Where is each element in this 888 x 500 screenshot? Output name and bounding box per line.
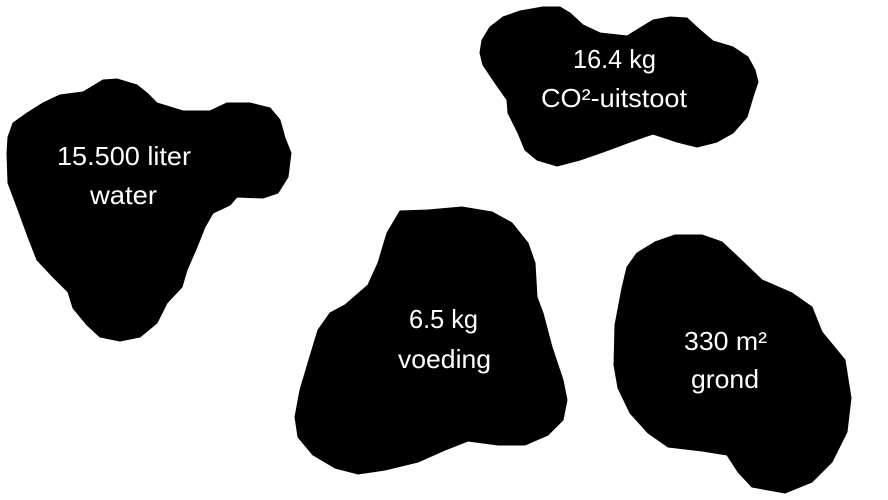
text: 15.500 liter water: 15.500 liter: [57, 141, 191, 171]
blob: voeding: [295, 207, 567, 474]
blob: CO2: [480, 7, 758, 166]
text: 16.4 kg CO2-uitstoot: CO²-uitstoot: [541, 83, 688, 113]
text: 16.4 kg CO2-uitstoot: [541, 44, 688, 113]
text: 16.4 kg CO2-uitstoot: 16.4 kg: [573, 44, 656, 74]
text: 330 m2 grond: grond: [691, 364, 759, 394]
text: 6.5 kg voeding: [398, 304, 491, 374]
text: 6.5 kg voeding: voeding: [398, 344, 491, 374]
shape: CO2 blob: [480, 7, 758, 166]
blob: grond: [614, 235, 851, 493]
text: 330 m2 grond: [684, 326, 767, 394]
text: 6.5 kg voeding: 6.5 kg: [409, 304, 478, 334]
text: 330 m2 grond: 330 m²: [684, 326, 767, 356]
shape: voeding blob: [295, 207, 567, 474]
text: 15.500 liter water: [57, 141, 191, 210]
blob: water: [7, 79, 291, 341]
shape: water blob: [7, 79, 291, 341]
shape: grond blob: [614, 235, 851, 493]
text: 15.500 liter water: water: [89, 180, 157, 210]
